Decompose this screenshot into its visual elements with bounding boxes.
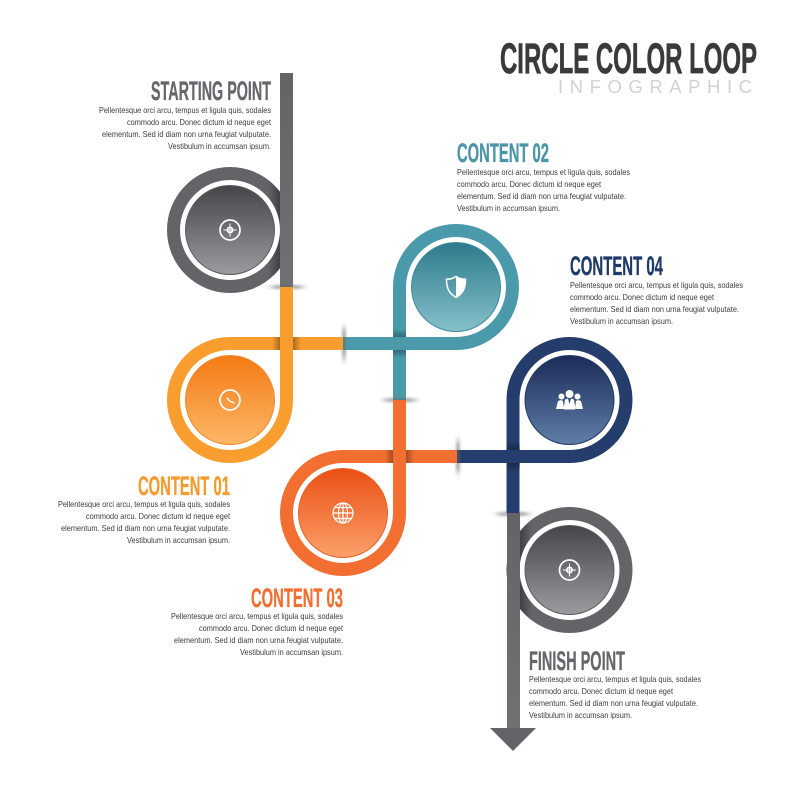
text block: finish point: elementum. Sed id diam non urna feugiat vulputate.: [529, 698, 698, 708]
text block: content 02: Pellentesque orci arcu, tempus et ligula quis, sodales: [457, 167, 630, 177]
text block: content 01: CONTENT 01: [138, 471, 230, 501]
text block: starting point: STARTING POINT: [151, 76, 271, 106]
text block: content 03: commodo arcu. Donec dictum id neque eget: [199, 623, 344, 633]
text block: content 02: CONTENT 02: [457, 138, 549, 168]
text block: content 04: commodo arcu. Donec dictum id neque eget: [570, 292, 715, 302]
icon: compass: [220, 220, 240, 240]
icon: globe: [333, 503, 353, 523]
text block: content 01: elementum. Sed id diam non urna feugiat vulputate.: [61, 523, 230, 533]
subtitle: INFOGRAPHIC: [558, 76, 752, 97]
text block: content 01: Vestibulum in accumsan ipsum.: [127, 535, 230, 545]
text block: starting point: Vestibulum in accumsan ipsum.: [168, 141, 271, 151]
disc: finish: [525, 526, 614, 614]
text block: finish point: FINISH POINT: [529, 646, 625, 676]
text block: content 03: Vestibulum in accumsan ipsum.: [240, 647, 343, 657]
text block: content 04: CONTENT 04: [570, 251, 663, 281]
text block: finish point: [529, 646, 701, 720]
text block: content 02: elementum. Sed id diam non urna feugiat vulputate.: [457, 191, 626, 201]
text block: finish point: Pellentesque orci arcu, tempus et ligula quis, sodales: [529, 674, 701, 684]
disc: content 04: [525, 356, 614, 444]
text block: content 02: Vestibulum in accumsan ipsum.: [457, 203, 560, 213]
finish loop: gray ring and arrow: [490, 513, 626, 751]
shadow: orange to teal seam: [342, 328, 346, 359]
text block: content 03: [171, 583, 344, 657]
orange loop: [174, 287, 343, 456]
navy loop: [457, 344, 626, 513]
icon: shield: [446, 276, 466, 297]
text block: content 01: [58, 471, 231, 545]
text block: starting point: [99, 76, 272, 151]
disc: start: [186, 186, 274, 274]
teal loop: [343, 230, 512, 400]
icon: clock: [220, 390, 240, 410]
shadow: orange-red to navy seam: [456, 441, 460, 472]
arrowhead: [490, 728, 536, 751]
icon: compass: [560, 560, 580, 580]
text block: starting point: Pellentesque orci arcu, tempus et ligula quis, sodales: [99, 105, 271, 115]
text block: content 03: elementum. Sed id diam non urna feugiat vulputate.: [174, 635, 343, 645]
icon: people: [556, 390, 583, 410]
text block: content 02: [457, 138, 630, 213]
text block: finish point: Vestibulum in accumsan ipsum.: [529, 710, 632, 720]
disc: content 01: [186, 356, 274, 444]
text block: content 04: Pellentesque orci arcu, tempus et ligula quis, sodales: [570, 280, 743, 290]
text block: content 03: Pellentesque orci arcu, tempus et ligula quis, sodales: [171, 611, 343, 621]
text block: content 04: [570, 251, 743, 326]
text block: starting point: elementum. Sed id diam non urna feugiat vulputate.: [102, 129, 271, 139]
disc: content 02: [412, 242, 500, 332]
text block: starting point: commodo arcu. Donec dictum id neque eget: [127, 117, 272, 127]
text block: content 01: Pellentesque orci arcu, tempus et ligula quis, sodales: [58, 499, 230, 509]
shadow: teal to orange-red seam: [385, 398, 415, 402]
text block: content 02: commodo arcu. Donec dictum id neque eget: [457, 179, 602, 189]
text block: content 01: commodo arcu. Donec dictum id neque eget: [86, 511, 231, 521]
shadow: navy to gray seam: [498, 512, 528, 516]
title: [500, 35, 757, 97]
text block: content 03: CONTENT 03: [251, 583, 343, 613]
text block: content 04: elementum. Sed id diam non urna feugiat vulputate.: [570, 304, 739, 314]
disc: content 03: [298, 468, 388, 558]
shadow: gray to orange seam: [272, 285, 302, 289]
starting loop: gray ring and bar: [174, 73, 293, 288]
text block: content 04: Vestibulum in accumsan ipsum.: [570, 316, 673, 326]
orange-red loop: [286, 400, 457, 570]
text block: finish point: commodo arcu. Donec dictum id neque eget: [529, 686, 674, 696]
